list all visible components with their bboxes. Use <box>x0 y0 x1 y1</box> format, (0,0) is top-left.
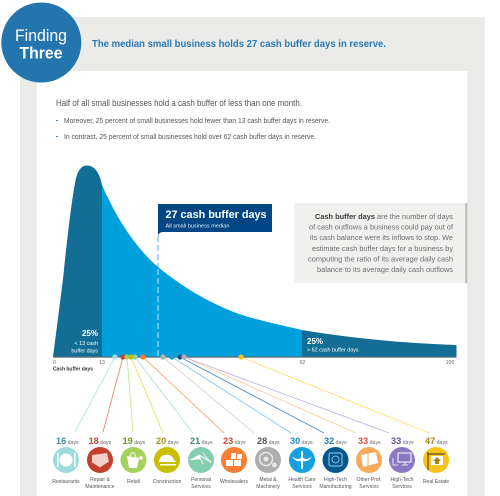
title: The median small business holds 27 cash buffer days in reserve. <box>92 39 386 50</box>
intro text block: Half of all small businesses hold a cash buffer of less than one month. <box>56 98 302 108</box>
upper quartile label <box>307 337 359 354</box>
industry: Metal and Machinery: 28 days <box>257 436 280 446</box>
industry: High-Tech Services: High-Tech <box>391 477 414 483</box>
axis dots <box>112 354 244 360</box>
industry: Health Care Services: Services <box>292 484 312 490</box>
baseline <box>53 356 456 358</box>
industry: High-Tech Manufacturing: High-Tech <box>324 477 347 483</box>
industry: Personal Services: 21 days <box>190 436 213 446</box>
bullet: 25 percent over 62 days: In contrast, 25 percent of small businesses hold over 62 cash buffer days in reserve. <box>64 134 316 141</box>
curve: highest quartile <box>302 330 456 357</box>
industry: Health Care Services <box>288 436 316 490</box>
axis title: Cash buffer days <box>53 366 93 372</box>
curve: lowest quartile <box>53 166 102 357</box>
definition panel: estimate cash buffer days for a business by <box>312 244 453 253</box>
industry: Retail: 19 days <box>122 436 146 446</box>
industry: Retail: Retail <box>127 479 140 485</box>
industry: High-Tech Manufacturing: 32 days <box>324 436 347 446</box>
industry: High-Tech Services: Services <box>392 484 412 490</box>
industry: Repair and Maintenance: 18 days <box>88 436 112 446</box>
industry: Real Estate: 47 days <box>425 436 448 446</box>
industry: Other Prof. Services: Services <box>359 484 379 490</box>
median marker line <box>157 236 159 267</box>
median callout: 27 cash buffer days <box>166 209 266 221</box>
industry: Repair and Maintenance: Repair & <box>90 477 111 483</box>
industry: Restaurants <box>52 436 80 485</box>
intro text block <box>56 98 330 141</box>
industry: Real Estate: Real Estate <box>423 479 449 485</box>
badge: Finding Three <box>1 2 81 82</box>
industry: Personal Services <box>188 436 214 490</box>
definition panel: of cash outflows a business could pay out of <box>309 222 454 232</box>
axis labels: 62 <box>300 360 305 366</box>
industry: Real Estate <box>423 436 449 485</box>
axis labels: 13 <box>99 360 105 366</box>
industry: Retail <box>120 436 146 485</box>
axis labels <box>53 360 454 366</box>
industry: Other Prof. Services: Other Prof. <box>357 477 381 483</box>
definition panel: its cash balance were its inflows to stop. We <box>310 233 453 242</box>
industry: Restaurants: Restaurants <box>52 479 80 485</box>
industry: Wholesalers <box>220 436 248 485</box>
industry: Metal and Machinery <box>255 436 281 490</box>
industry: Other Prof. Services: 33 days <box>358 436 381 446</box>
industry: High-Tech Manufacturing: Manufacturing <box>319 484 352 490</box>
industry: Health Care Services: 30 days <box>290 436 313 446</box>
industry: Personal Services: Personal <box>191 477 211 483</box>
curve: middle 50 percent <box>102 185 302 357</box>
definition panel: balance to its average daily cash outflows <box>317 265 453 274</box>
distribution chart <box>53 166 456 372</box>
industry: Metal and Machinery: Machinery <box>256 484 280 490</box>
industry: Wholesalers: 23 days <box>223 436 246 446</box>
connector lines from axis to industries <box>75 357 429 433</box>
industry: High-Tech Manufacturing <box>319 436 352 490</box>
axis labels: 0 <box>53 360 56 366</box>
lower quartile label: buffer days <box>71 348 98 354</box>
industry: Metal and Machinery: Metal & <box>259 477 277 483</box>
industry: Construction: Construction <box>153 479 181 485</box>
industry: Restaurants: 16 days <box>56 436 79 446</box>
badge: Finding Three: Finding <box>15 26 67 45</box>
definition panel <box>294 203 468 283</box>
upper quartile label: 25% <box>307 337 323 346</box>
industry: Other Prof. Services <box>356 436 382 490</box>
definition panel: Cash buffer days are the number of days <box>315 212 453 221</box>
axis labels: 100 <box>446 360 454 366</box>
industry: Construction: 20 days <box>156 436 179 446</box>
industry: Wholesalers: Wholesalers <box>220 479 248 485</box>
industry: Repair and Maintenance <box>85 436 115 490</box>
industry: High-Tech Services <box>389 436 415 490</box>
badge: Finding Three: Three <box>20 44 62 62</box>
lower quartile label: 25% <box>82 329 98 338</box>
industry: High-Tech Services: 33 days <box>391 436 414 446</box>
industry: Construction <box>153 436 181 485</box>
upper quartile label: > 62 cash buffer days <box>307 348 359 354</box>
industry: Personal Services: Services <box>191 484 211 490</box>
median callout: All small business median <box>166 224 230 230</box>
median callout <box>158 204 272 237</box>
lower quartile label <box>71 329 98 354</box>
bullet: 25 percent under 13 days: Moreover, 25 percent of small businesses hold fewer than 13 cash buffer days in reserve. <box>64 118 330 125</box>
definition panel: computing the ratio of its average daily cash <box>308 254 453 264</box>
industry: Health Care Services: Health Care <box>288 477 316 483</box>
industry: Repair and Maintenance: Maintenance <box>85 484 115 490</box>
lower quartile label: < 13 cash <box>74 341 98 347</box>
